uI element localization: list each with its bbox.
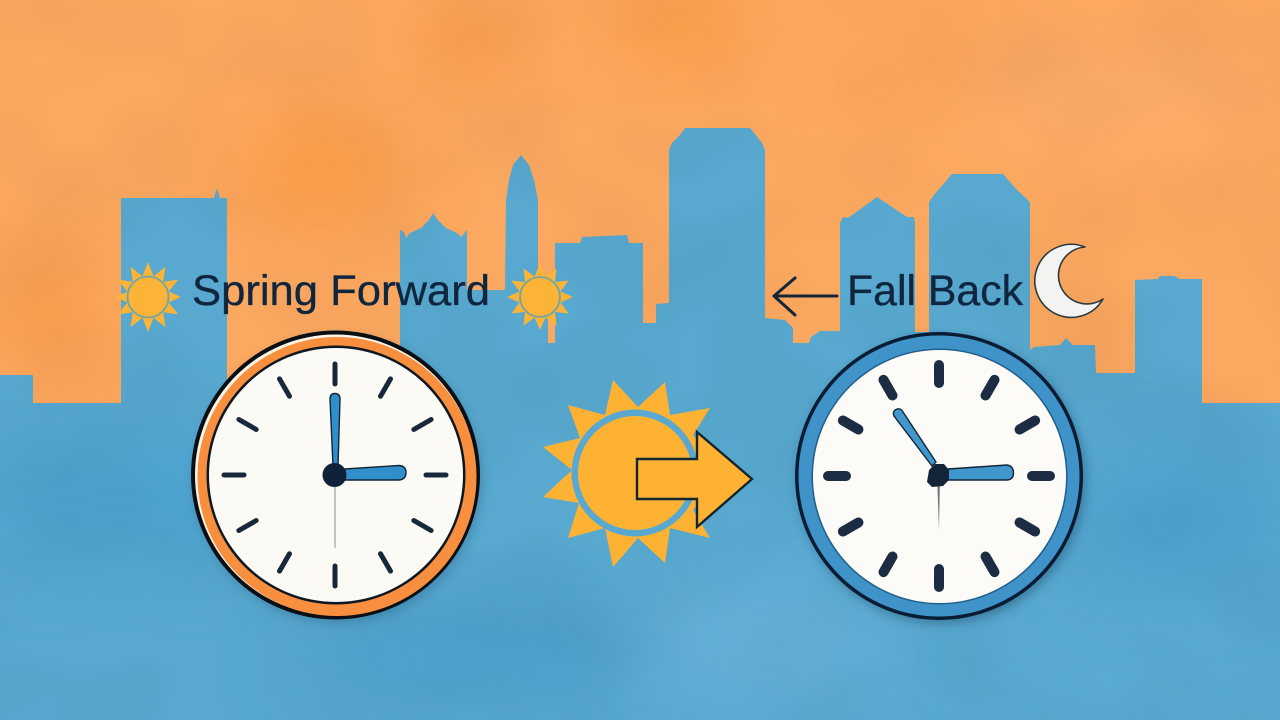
hour ticks	[224, 364, 446, 586]
arrow pointing left	[774, 278, 837, 315]
minute hand	[893, 409, 936, 466]
second hand	[937, 476, 940, 530]
hour hand	[345, 466, 406, 480]
arrow pointing right	[637, 432, 752, 527]
hour ticks	[828, 365, 1050, 587]
center hub	[322, 463, 346, 487]
hour hand	[948, 465, 1014, 480]
icon: crescent moon	[1035, 244, 1103, 317]
icon: sun with arrow	[543, 380, 752, 567]
heading: Fall Back: Fall Back	[847, 267, 1023, 315]
clock: fall back	[795, 332, 1086, 624]
center hub	[927, 464, 949, 487]
minute hand	[330, 394, 340, 466]
spring sun icon right	[507, 264, 573, 330]
spring sun icon left	[114, 262, 182, 332]
clock: spring forward	[191, 330, 482, 623]
second hand	[334, 475, 336, 548]
heading: Spring Forward: Spring Forward	[192, 267, 490, 315]
